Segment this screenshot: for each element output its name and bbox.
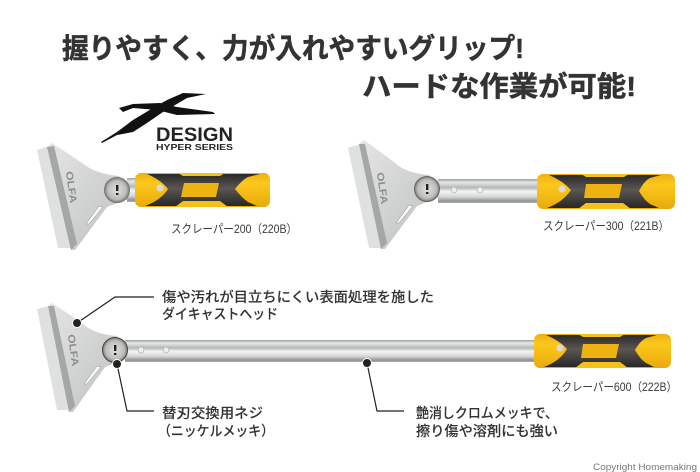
- blade: [37, 306, 69, 410]
- screw: [102, 338, 128, 362]
- tube: [125, 340, 534, 362]
- brand mark: OLFA: [65, 334, 80, 367]
- tool: scraper 300: [348, 140, 675, 249]
- screw: [414, 176, 440, 202]
- screw: [104, 178, 130, 202]
- strut slot: [396, 205, 413, 223]
- callout: die-cast head: [72, 289, 434, 328]
- brand mark: OLFA: [374, 172, 389, 205]
- tube: [438, 179, 537, 203]
- leader line: screw: [117, 364, 154, 411]
- label: scraper 200: スクレーパー200（220B）: [171, 222, 297, 236]
- callout: matte chrome plating: [362, 358, 558, 439]
- head plate: [47, 143, 131, 250]
- blade: [348, 144, 381, 248]
- strut slot: [86, 206, 103, 224]
- head bevel: [47, 146, 77, 250]
- logo: X Design Hyper Series: HYPER SERIES: [156, 143, 234, 152]
- marker dot: chrome: [362, 358, 372, 368]
- logo: X Design Hyper Series: [101, 93, 234, 152]
- strut slot: [84, 366, 101, 384]
- blade: [37, 146, 72, 248]
- title line 1: 握りやすく、力が入れやすいグリップ!: [62, 32, 524, 64]
- leader line: chrome: [367, 363, 404, 411]
- callout text: screw: （ニッケルメッキ）: [158, 423, 274, 439]
- logo: X Design Hyper Series: DESIGN: [156, 125, 233, 146]
- label: scraper 600: スクレーパー600（222B）: [551, 380, 677, 394]
- callout text: screw: 替刃交換用ネジ: [162, 405, 263, 421]
- title line 2: ハードな作業が可能!: [362, 70, 636, 102]
- head bevel: [48, 306, 75, 412]
- head plate: [359, 140, 439, 249]
- handle 300: [537, 174, 675, 209]
- callout text: chrome: 艶消しクロムメッキで、: [416, 405, 558, 421]
- handle 200: [135, 173, 270, 207]
- tool: scraper 200: [37, 143, 136, 250]
- callout: replacement blade screw: [112, 360, 274, 439]
- marker dot: head: [72, 318, 82, 328]
- tool: scraper 600: [37, 303, 671, 412]
- callout text: head: ダイキャストヘッド: [162, 306, 278, 322]
- brand mark: OLFA: [63, 171, 78, 204]
- callout text: head: 傷や汚れが目立ちにくい表面処理を施した: [162, 289, 434, 305]
- marker dot: screw: [112, 360, 122, 368]
- callout text: chrome: 擦り傷や溶剤にも強い: [416, 423, 558, 439]
- neck: [127, 178, 136, 202]
- head plate: [48, 303, 127, 412]
- handle 600: [534, 334, 671, 368]
- leader line: head: [77, 297, 154, 323]
- label: scraper 300: スクレーパー300（221B）: [543, 219, 669, 233]
- head bevel: [359, 144, 387, 249]
